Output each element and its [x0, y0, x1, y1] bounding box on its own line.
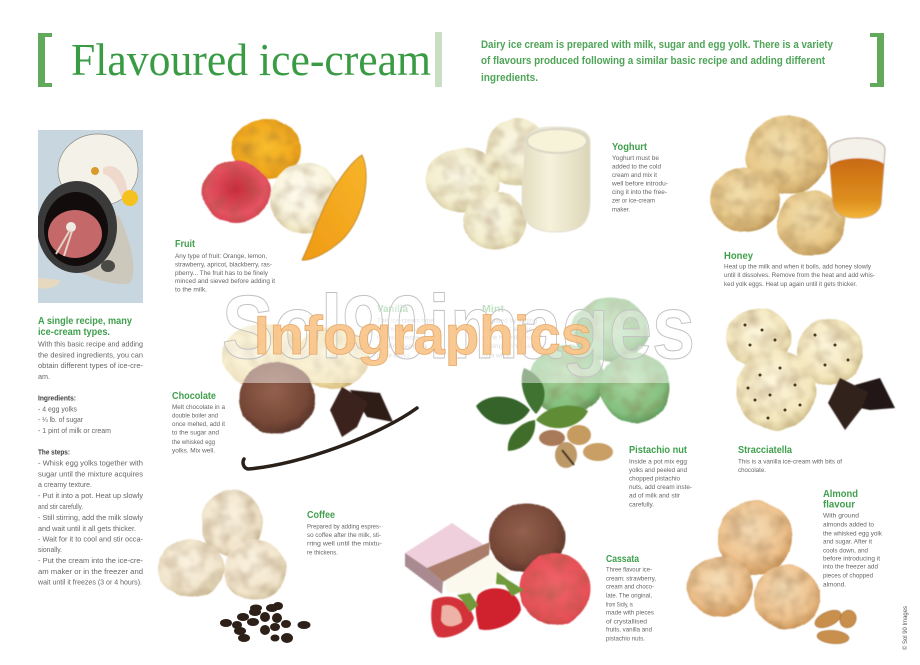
pistachio text: ad of milk and stir [629, 492, 681, 500]
mint text (under watermark): Mint [482, 304, 505, 315]
cassata text: made with pieces [606, 610, 655, 616]
glass of honey [829, 138, 885, 218]
steps: sugar until the mixture acquires [38, 470, 143, 478]
steps: sionally. [38, 545, 62, 554]
vanilla text (under watermark): pod or extract. [377, 352, 411, 360]
cassata text: pistachio nuts. [606, 636, 645, 642]
fruit text: Fruit [175, 238, 195, 250]
yoghurt text: Yoghurt [612, 141, 647, 153]
almond text: and sugar. After it [823, 538, 872, 546]
pistachio text: Inside a pot mix egg [629, 458, 687, 466]
yoghurt text: cream and mix it [612, 172, 657, 179]
almond text [823, 488, 883, 588]
honey text: until it dissolves. Remove from the heat and add whis- [724, 272, 875, 279]
pistachio text: carefully. [629, 502, 654, 508]
left bracket [38, 33, 52, 87]
stracciatella text [738, 444, 842, 474]
mint scoops [529, 298, 670, 423]
steps [37, 448, 144, 586]
yoghurt text: added to the cold [612, 164, 661, 170]
pistachio text: nuts, add cream inste- [629, 484, 692, 491]
honey text [724, 250, 875, 288]
steps: - Put it into a pot. Heat up slowly [38, 491, 143, 500]
chocolate pieces [330, 387, 393, 437]
almond text: With ground [823, 512, 859, 520]
chocolate text: to the sugar and [172, 430, 219, 436]
fruit text: strawberry, apricot, blackberry, ras- [175, 262, 272, 268]
intro paragraph: With this basic recipe and adding [38, 340, 143, 348]
yoghurt text: zer or ice-cream [612, 198, 655, 204]
watermark outline text: Sol90images [222, 278, 695, 378]
ingredients: Ingredients: [38, 394, 76, 402]
yoghurt image [426, 118, 590, 250]
vanilla and chocolate image [222, 324, 417, 469]
coffee text: rring well until the mixtu- [307, 540, 382, 548]
chocolate bits [744, 324, 850, 420]
fruit text [175, 238, 275, 294]
intro text: Dairy ice cream is prepared with milk, sugar and egg yolk. There is a variety [481, 39, 833, 51]
mint and pistachio image [476, 298, 670, 468]
mint text (under watermark): for a while. [482, 352, 512, 360]
coffee text [307, 509, 382, 556]
chocolate text: Melt chocolate in a [172, 404, 225, 411]
cassata text: of crystallised [606, 618, 647, 626]
strawberries [431, 572, 524, 638]
almond text: almond. [823, 582, 846, 588]
coffee text: Prepared by adding espres- [307, 524, 381, 530]
pistachio text: yolks and peeled and [629, 467, 687, 474]
yoghurt text: maker. [612, 206, 630, 214]
chocolate text: once melted, add it [172, 421, 225, 428]
text: a single recipe [37, 315, 144, 586]
intro paragraph: am. [38, 372, 50, 381]
heading [38, 315, 132, 338]
vanilla text (under watermark): Vanilla [377, 304, 408, 315]
mint text (under watermark): Prepared by adding [482, 318, 537, 324]
yoghurt text: cing it into the free- [612, 189, 667, 196]
title: Flavoured ice-cream [71, 34, 431, 85]
pistachios [539, 425, 613, 468]
chocolate text [172, 390, 225, 454]
chocolate scoop [239, 362, 315, 434]
steps: - Still stirring, add the milk slowly [38, 513, 143, 522]
cassata text: Three flavour ice- [606, 566, 652, 574]
photo: ice-cream maker [37, 130, 143, 303]
red scoop [520, 553, 590, 625]
scoops [202, 119, 340, 233]
chocolate scoop [489, 503, 565, 573]
ingredients [38, 394, 111, 435]
stracciatella text: Stracciatella [738, 444, 792, 456]
yoghurt text: well before introdu- [611, 180, 668, 188]
stracciatella image [726, 309, 895, 430]
vanilla text (under watermark): is prepared with [377, 326, 427, 333]
coffee text: Coffee [307, 509, 335, 521]
mint text (under watermark): letting it infuse [482, 343, 532, 350]
almond text: almonds added to [823, 522, 874, 528]
scoops [158, 490, 286, 600]
intro text: ingredients. [481, 72, 538, 84]
steps: a creamy texture. [38, 480, 92, 489]
chocolate text: Chocolate [172, 390, 216, 402]
ingredients: - ¼ lb. of sugar [38, 415, 83, 424]
heading: ice-cream types. [38, 326, 110, 338]
title block [38, 32, 442, 87]
fruit text: Any type of fruit: Orange, lemon, [175, 253, 267, 260]
coffee text: so coffee after the milk, sti- [307, 532, 381, 539]
honey text: Honey [724, 250, 753, 262]
scoops [726, 309, 863, 430]
scoops [426, 118, 548, 250]
almond text: cools down, and [823, 548, 868, 554]
intro text [481, 39, 833, 84]
vanilla scoops [222, 324, 370, 388]
steps: - Whisk egg yolks together with [38, 458, 143, 468]
almond text: pieces of chopped [823, 572, 873, 580]
yoghurt text [611, 141, 668, 214]
right bracket [870, 33, 884, 87]
stracciatella text: chocolate. [738, 467, 766, 474]
heading: A single recipe, many [38, 315, 132, 327]
intro paragraph: the desired ingredients, you can [38, 350, 143, 360]
intro text: of flavours produced following a similar basic recipe and adding different [481, 55, 825, 67]
mint text (under watermark): to the hot milk and [482, 334, 532, 342]
almond image [687, 501, 859, 645]
vanilla pod [243, 408, 417, 469]
steps: wait until it freezes (3 or 4 hours). [37, 578, 142, 586]
scoops [687, 501, 820, 629]
watermark orange text: Infographics [254, 304, 592, 366]
chocolate pieces [828, 378, 895, 430]
chocolate text: double boiler and [172, 412, 218, 420]
chocolate text: yolks. Mix well. [172, 448, 215, 454]
vanilla text (under watermark): adding vanilla [377, 343, 427, 350]
steps: The steps: [38, 448, 70, 456]
cassata text: cream: strawberry, [606, 576, 656, 582]
steps: - Put the cream into the ice-cre- [38, 556, 144, 565]
fruit text: to the milk. [175, 286, 207, 294]
intro paragraph: obtain different types of ice-cre- [38, 361, 144, 370]
stracciatella text: This is a vanilla ice-cream with bits of [738, 458, 842, 466]
cassata text: fruits, vanilla and [606, 626, 652, 634]
intro paragraph [38, 340, 144, 381]
faded band [215, 292, 695, 383]
honey text: Heat up the milk and when it boils, add honey slowly [724, 264, 872, 270]
pistachio text [629, 444, 692, 508]
cassata text: late. The original, [606, 592, 652, 600]
jar [522, 127, 590, 232]
watermark [215, 278, 695, 383]
mint leaves [476, 368, 588, 451]
steps: am maker or in the freezer and [38, 567, 143, 576]
pistachio text: chopped pistachio [629, 476, 680, 482]
cassata text: Cassata [606, 553, 639, 565]
photo credit: © Sol 90 Images [902, 606, 909, 650]
mint text (under watermark): fresh mint leaves [482, 326, 533, 333]
coffee text: re thickens. [307, 550, 338, 556]
mint text (under watermark) [482, 304, 537, 360]
fruit ice-cream image [202, 119, 366, 260]
cassata text: cream and choco- [606, 584, 654, 590]
almond text: Almond [823, 488, 858, 500]
honey text: ked yolk eggs. Heat up again until it gets thicker. [724, 281, 857, 288]
almond text: flavour [823, 498, 855, 510]
chocolate text: the whisked egg [172, 439, 215, 446]
steps: and wait until it all gets thicker. [38, 524, 136, 533]
coffee beans [220, 602, 310, 643]
vanilla text (under watermark): the basic recipe and [377, 334, 431, 342]
mango slice [302, 155, 366, 260]
fruit text: minced and sieved before adding it [175, 278, 275, 285]
yoghurt text: Yoghurt must be [612, 155, 659, 162]
honey image [710, 116, 885, 256]
fruit text: pberry... The fruit has to be finely [175, 270, 269, 277]
almond text: the whisked egg yolk [823, 530, 883, 538]
cassata image [405, 503, 590, 638]
cassata text [606, 553, 656, 642]
almond text: before introducing it [823, 556, 880, 562]
almond text: into the freezer add [823, 564, 878, 570]
vanilla text (under watermark): This ice-cream type [377, 318, 434, 324]
pistachio text: Pistachio nut [629, 444, 687, 456]
cassata text: from Sicily, is [606, 602, 633, 608]
title divider [435, 32, 442, 87]
vanilla text (under watermark) [377, 304, 434, 360]
cassata slice [405, 523, 512, 595]
ingredients: - 1 pint of milk or cream [38, 426, 111, 435]
almonds [812, 607, 859, 645]
scoops [710, 116, 845, 256]
ingredients: - 4 egg yolks [38, 404, 77, 414]
coffee image [158, 490, 310, 643]
steps: and stir carefully. [38, 502, 83, 511]
steps: - Wait for it to cool and stir occa- [38, 534, 144, 544]
